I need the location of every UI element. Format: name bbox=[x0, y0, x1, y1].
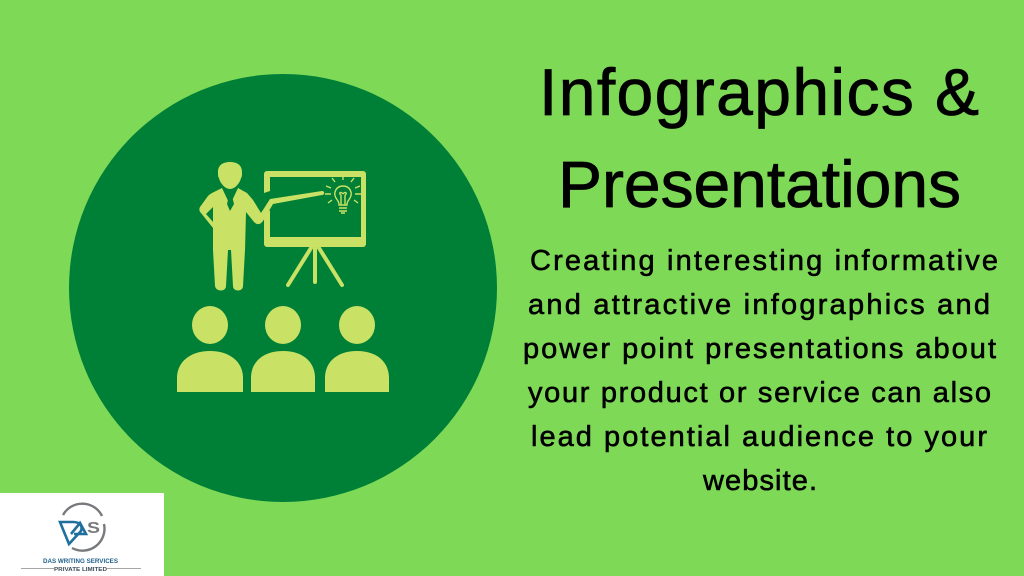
logo subtitle: PRIVATE LIMITED bbox=[54, 567, 107, 573]
icon: presenter with board and audience bbox=[177, 162, 389, 392]
icon: logo ring bbox=[63, 504, 105, 551]
text block: description: website. bbox=[702, 465, 817, 497]
presenter body bbox=[199, 188, 324, 290]
logo letter S: S bbox=[87, 520, 100, 537]
presenter head bbox=[218, 162, 242, 189]
panel: green circle bbox=[69, 74, 497, 502]
text block: description: lead potential audience to your bbox=[531, 421, 987, 453]
icon: audience person 3 bbox=[325, 306, 389, 392]
presenter tie bbox=[227, 191, 234, 211]
icon: presenter bbox=[199, 162, 324, 290]
icon: audience person 2 bbox=[251, 306, 315, 392]
logo company name: DAS WRITING SERVICES bbox=[43, 559, 118, 565]
text block: description bbox=[523, 245, 998, 497]
text block: description: and attractive infographics and bbox=[528, 289, 990, 321]
icon: presentation board bbox=[264, 171, 366, 247]
text block: description: power point presentations about bbox=[523, 333, 996, 365]
icon: logo shield bbox=[60, 522, 86, 544]
text block: description: Creating interesting informative bbox=[530, 245, 998, 277]
text block: description: your product or service can also bbox=[528, 377, 991, 409]
icon: audience person 1 bbox=[177, 306, 243, 392]
title: Infographics & bbox=[539, 55, 979, 129]
icon: light bulb bbox=[325, 175, 361, 213]
title: Presentations bbox=[558, 147, 961, 221]
logo panel bbox=[0, 493, 164, 576]
title bbox=[539, 55, 979, 221]
icon: board easel bbox=[288, 248, 342, 285]
